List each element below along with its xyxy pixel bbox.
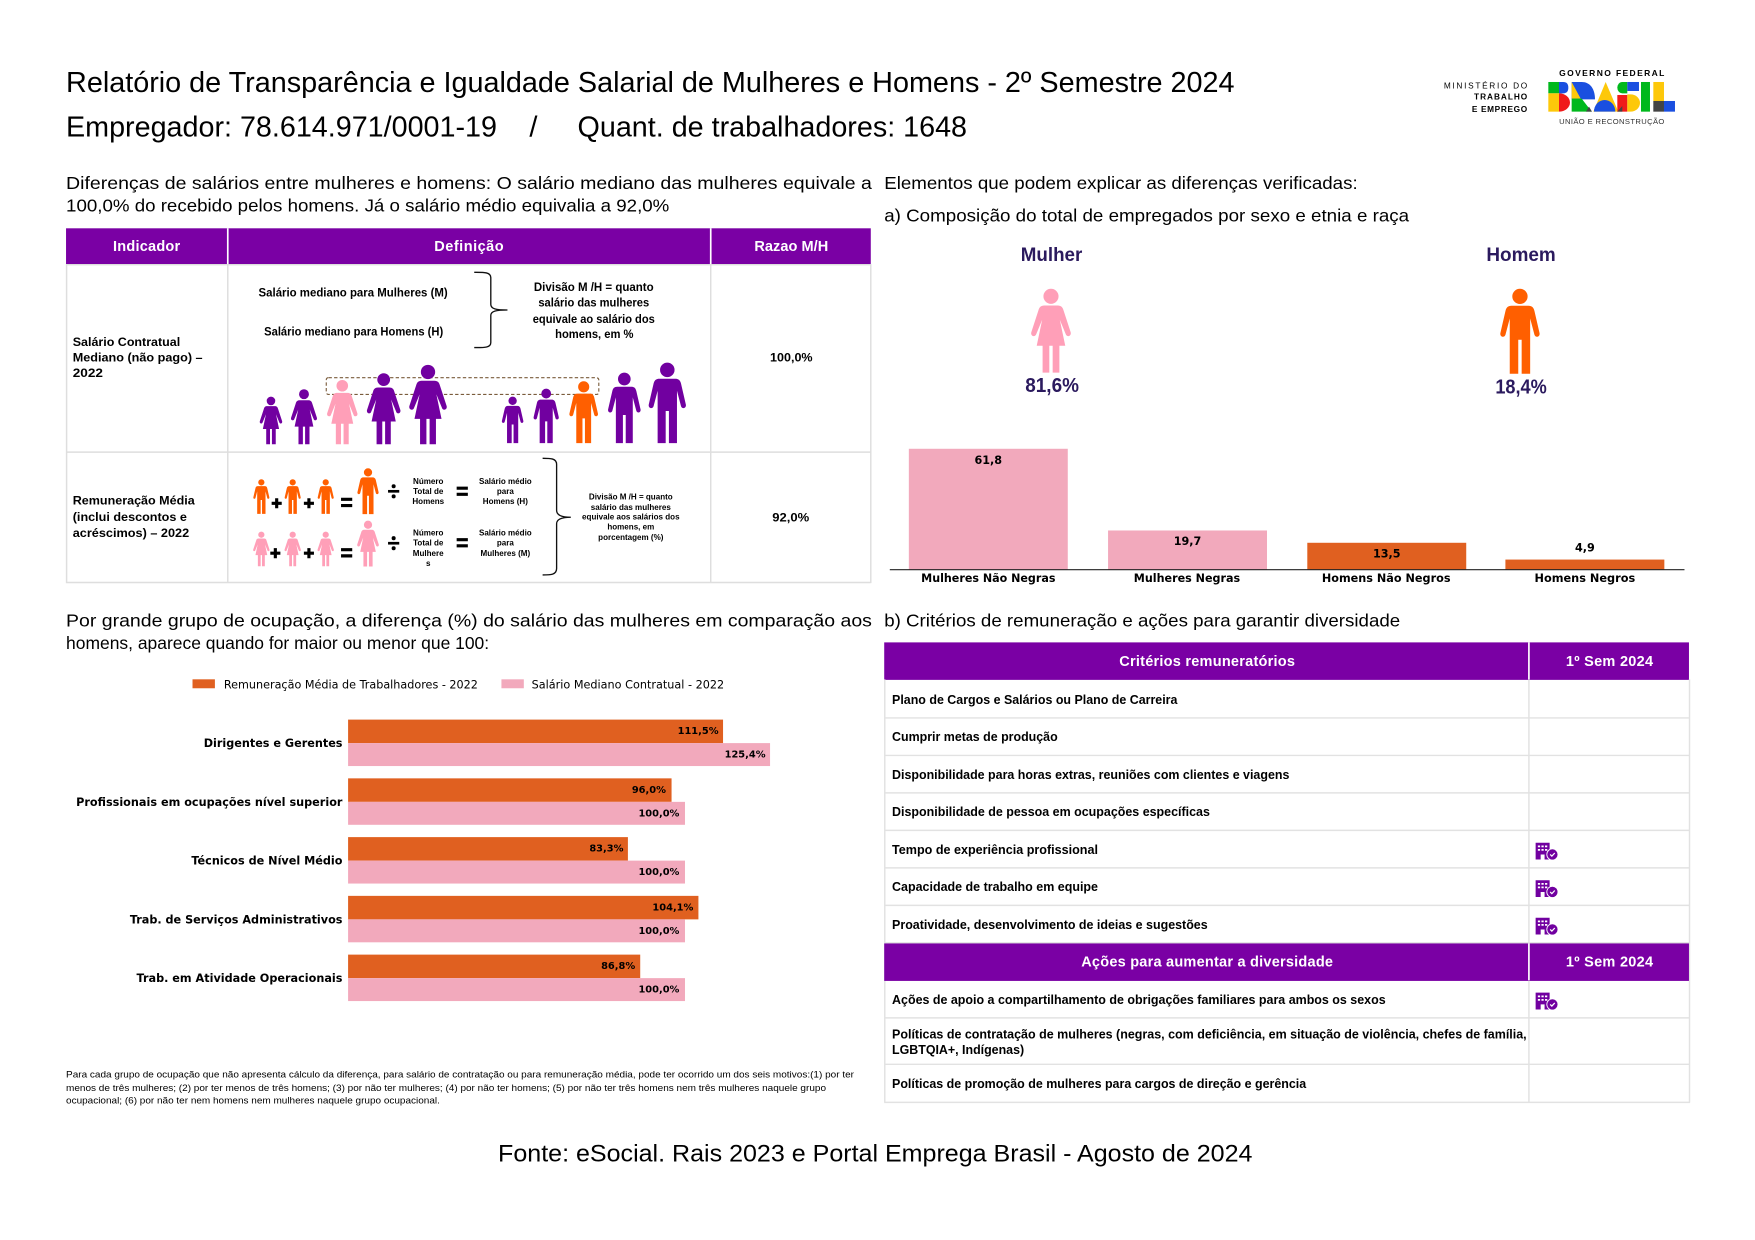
bars: atividade operacionais: Trab. em Atividade Operacionais (137, 972, 343, 985)
bars: técnicos: 83,3% (589, 844, 624, 855)
bars: atividade operacionais: 100,0% (638, 985, 680, 996)
title: Empregador: 78.614.971/0001-19 (66, 112, 497, 144)
bars: atividade operacionais: 86,8% (601, 961, 635, 972)
text: elementos que podem explicar: Elementos que podem explicar as diferenças verificadas: (884, 173, 1358, 193)
row label: salário contratual (73, 335, 203, 380)
footnote (66, 1070, 854, 1105)
table header: Indicador (113, 239, 181, 255)
people: men by salary (502, 363, 686, 443)
header: critérios remuneratórios: 1º Sem 2024 (1566, 654, 1653, 670)
brace (474, 272, 507, 348)
legend (193, 678, 724, 691)
text: por grande grupo: homens, aparece quando for maior ou menor que 100: (66, 633, 489, 653)
panel: homem: Homem (1486, 245, 1556, 266)
text: divisão M/H: Divisão M /H = quanto (534, 280, 654, 294)
bars: serviços administrativos (130, 896, 698, 942)
bars: técnicos: 100,0% (638, 867, 680, 878)
text: diferenças de salários: Diferenças de salários entre mulheres e homens: O salário mediano das mulheres equivale a (66, 173, 872, 193)
criteria rows: Cumprir metas de produção (892, 730, 1058, 744)
formula: homens: para (497, 487, 514, 496)
value: 92,0%: 92,0% (772, 511, 809, 525)
bar chart: composição: Mulheres Negras (1134, 572, 1240, 585)
logo: ministério e governo federal: UNIÃO E RECONSTRUÇÃO (1559, 117, 1664, 126)
formula: homens: Total de (413, 487, 444, 496)
bars: dirigentes e gerentes: 111,5% (678, 726, 719, 737)
logo: ministério e governo federal (1444, 68, 1675, 126)
table header: Definição (434, 239, 504, 255)
bars: profissionais (76, 778, 685, 825)
text: divisão M/H percentagem (582, 493, 680, 542)
formula: mulheres: Mulheres (M) (481, 549, 530, 558)
formula: mulheres: Salário médio (479, 529, 532, 538)
panel: homem: 18,4% (1495, 376, 1547, 398)
text: divisão M/H: salário das mulheres (538, 296, 649, 310)
text: elementos que podem explicar (884, 173, 1409, 226)
criteria rows (892, 693, 1289, 932)
bar chart: composição: Homens Não Negros (1322, 572, 1451, 585)
people: women by salary (260, 365, 447, 444)
table grid (884, 679, 1690, 1102)
bars: profissionais: 100,0% (638, 808, 680, 819)
header: ações para diversidade: 1º Sem 2024 (1566, 954, 1653, 970)
logo: ministério e governo federal: TRABALHO (1474, 93, 1528, 102)
text: por grande grupo (66, 611, 872, 653)
bars: serviços administrativos: 104,1% (652, 902, 694, 913)
panel: mulher: Mulher (1021, 245, 1083, 266)
text: divisão M/H percentagem: salário das mulheres (591, 503, 671, 512)
row label: remuneração média: Remuneração Média (73, 494, 195, 508)
criteria rows: Tempo de experiência profissional (892, 843, 1098, 857)
formula: homens: Homens (H) (483, 497, 528, 506)
diversity rows: Ações de apoio a compartilhamento de obrigações familiares para ambos os sexos (892, 993, 1386, 1007)
bars: dirigentes e gerentes: 125,4% (725, 750, 766, 761)
text: por grande grupo: Por grande grupo de ocupação, a diferença (%) do salário das mulheres em comparação aos (66, 611, 872, 631)
criteria rows: Plano de Cargos e Salários ou Plano de Carreira (892, 693, 1178, 707)
diversity rows: Políticas de promoção de mulheres para cargos de direção e gerência (892, 1077, 1307, 1091)
diversity rows: Políticas de contratação de mulheres (negras, com deficiência, em situação de violência, chefes de família, (892, 1028, 1527, 1042)
formula: mulheres: Total de (413, 539, 444, 548)
bars: profissionais: Profissionais em ocupações nível superior (76, 796, 343, 809)
bars: técnicos: Técnicos de Nível Médio (191, 855, 343, 868)
text: divisão M/H percentagem: homens, em (607, 523, 654, 532)
text: divisão M/H: equivale ao salário dos (533, 312, 655, 326)
diversity rows (892, 993, 1527, 1091)
formula: mulheres: Mulhere (413, 549, 444, 558)
criteria rows: Disponibilidade de pessoa em ocupações específicas (892, 805, 1210, 819)
title (66, 67, 1235, 144)
bars: profissionais: 96,0% (632, 785, 666, 796)
formula: homens: Número (413, 477, 444, 486)
footnote: Para cada grupo de ocupação que não apresenta cálculo da diferença, para salário de contratação ou para remuneração média, pode ter ocorrido um dos seis motivos:(1) por ter (66, 1070, 854, 1080)
legend: Salário Mediano Contratual - 2022 (532, 678, 724, 691)
text: divisão M/H (533, 280, 655, 341)
formula: homens: Salário médio (479, 477, 532, 486)
text: salário mediano: Salário mediano para Mulheres (M) (259, 286, 448, 300)
text: salário mediano (259, 286, 448, 339)
text: divisão M/H percentagem: equivale aos salários dos (582, 513, 680, 522)
text: diferenças de salários (66, 173, 872, 216)
formula: homens (253, 468, 532, 514)
row label: salário contratual: Mediano (não pago) – (73, 350, 203, 364)
panel: tabela de critérios (884, 642, 1690, 1102)
icon: ação adotada (1536, 993, 1558, 1010)
footnote: ocupacional; (6) por não ter nem homens nem mulheres naquele grupo ocupacional. (66, 1095, 440, 1105)
criteria rows: Proatividade, desenvolvimento de ideias e sugestões (892, 918, 1208, 932)
footer source: Fonte: eSocial. Rais 2023 e Portal Emprega Brasil - Agosto de 2024 (498, 1141, 1252, 1168)
bars: serviços administrativos: Trab. de Serviços Administrativos (130, 913, 343, 926)
header: critérios remuneratórios: Critérios remuneratórios (1119, 654, 1295, 670)
diversity rows: LGBTQIA+, Indígenas) (892, 1043, 1024, 1057)
row label: salário contratual: Salário Contratual (73, 335, 180, 349)
criteria rows: Capacidade de trabalho em equipe (892, 880, 1098, 894)
logo: ministério e governo federal: MINISTÉRIO DO (1444, 80, 1528, 90)
value: 100,0%: 100,0% (770, 350, 813, 364)
text: divisão M/H: homens, em % (555, 327, 634, 341)
formula: mulheres (253, 521, 532, 568)
icons: critérios adotados (1536, 843, 1558, 935)
dashed median box (326, 378, 599, 394)
bars: técnicos (191, 837, 685, 884)
table header (66, 228, 871, 264)
panel: mulher: 81,6% (1025, 375, 1079, 397)
text: elementos que podem explicar: a) Composição do total de empregados por sexo e etnia e raça (884, 206, 1409, 226)
bar chart: composição: 4,9 (1575, 542, 1595, 555)
header: ações para diversidade: Ações para aumentar a diversidade (1081, 954, 1333, 970)
bar chart: composição: 19,7 (1174, 535, 1201, 548)
header: critérios remuneratórios (884, 642, 1689, 680)
footnote: menos de três mulheres; (2) por ter menos de três homens; (3) por não ter mulheres; (4) por não ter homens; (5) por não ter três homens nem três mulheres naquele grupo (66, 1083, 826, 1093)
panel: homem (1486, 245, 1556, 398)
title: / (529, 112, 538, 144)
formula: mulheres: Número (413, 529, 444, 538)
bar chart: composição: Homens Negros (1535, 572, 1636, 585)
formula: homens: Homens (412, 497, 445, 506)
bar chart: ocupações (76, 720, 770, 1001)
bars: dirigentes e gerentes: Dirigentes e Gerentes (204, 737, 343, 750)
bars: dirigentes e gerentes (204, 720, 770, 766)
table header: Razao M/H (754, 239, 828, 255)
criteria rows: Disponibilidade para horas extras, reuniões com clientes e viagens (892, 768, 1289, 782)
icon: woman (1031, 289, 1071, 373)
text: diferenças de salários: 100,0% do recebido pelos homens. Já o salário médio equivalia a 92,0% (66, 196, 669, 216)
row label: remuneração média: (inclui descontos e (73, 510, 187, 524)
text: divisão M/H percentagem: Divisão M /H = quanto (589, 493, 673, 502)
panel: tabela indicador definição razão (66, 228, 871, 583)
formula: mulheres: s (426, 559, 431, 568)
row label: remuneração média: acréscimos) – 2022 (73, 526, 189, 540)
row label: remuneração média (73, 494, 195, 540)
header: ações para diversidade (884, 943, 1689, 981)
title: Relatório de Transparência e Igualdade Salarial de Mulheres e Homens - 2º Semestre 2024 (66, 67, 1235, 99)
title: Quant. de trabalhadores: 1648 (578, 112, 967, 144)
bar chart: composição: 13,5 (1373, 547, 1401, 560)
bar chart: composição: 61,8 (975, 454, 1002, 467)
logo: ministério e governo federal: E EMPREGO (1472, 105, 1528, 114)
text: salário mediano: Salário mediano para Homens (H) (264, 325, 443, 339)
table grid (66, 264, 871, 583)
bar chart: composição (890, 449, 1684, 585)
text: divisão M/H percentagem: porcentagem (%) (598, 533, 664, 542)
bars: serviços administrativos: 100,0% (638, 926, 680, 937)
panel: mulher (1021, 245, 1083, 397)
logo: ministério e governo federal: GOVERNO FEDERAL (1559, 68, 1664, 78)
text: critérios de remuneração heading: b) Critérios de remuneração e ações para garantir diversidade (884, 611, 1400, 631)
row label: salário contratual: 2022 (73, 366, 103, 380)
brace 2 (543, 458, 571, 575)
icon: man (1500, 289, 1540, 374)
legend: Remuneração Média de Trabalhadores - 2022 (224, 678, 478, 691)
bars: atividade operacionais (137, 955, 685, 1001)
bar chart: composição: Mulheres Não Negras (921, 572, 1056, 585)
formula: mulheres: para (497, 539, 514, 548)
